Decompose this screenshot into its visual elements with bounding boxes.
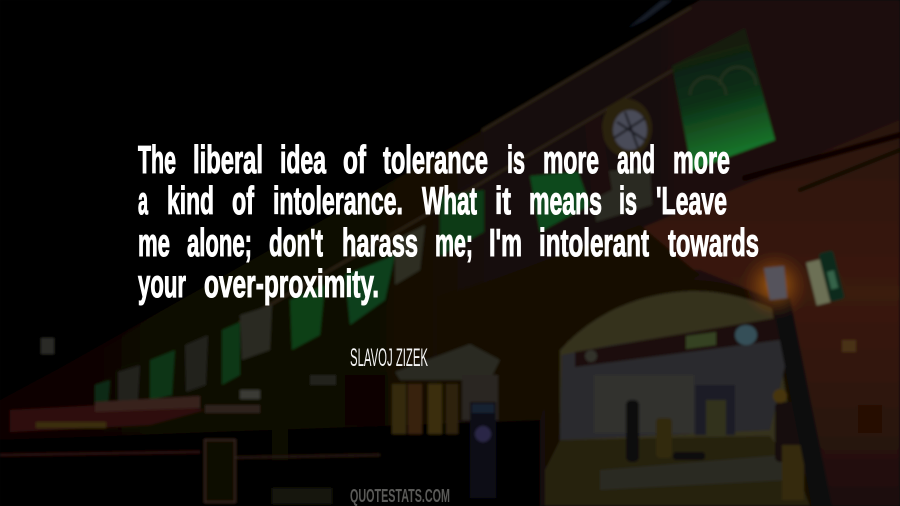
- watermark: QUOTESTATS.COM: [350, 486, 450, 506]
- quote line 3: don't: [269, 222, 323, 265]
- quote line 3: me;: [435, 222, 473, 265]
- cafe awnings and lights: [0, 390, 380, 502]
- watermark backdrop strip: [272, 488, 332, 504]
- quote line 2: it: [495, 180, 511, 223]
- quote line 3: intolerant: [539, 222, 649, 265]
- brick window: [858, 405, 882, 433]
- station arch: [545, 280, 830, 506]
- quote line 2: is: [619, 180, 637, 223]
- quote line 1: of: [343, 139, 367, 182]
- cream panel: [592, 168, 652, 222]
- shop entrance windows (lower centre): [310, 344, 500, 498]
- street lamp and post: [741, 251, 832, 506]
- quote line 2: [138, 180, 727, 223]
- quote line 1: The: [138, 139, 176, 182]
- vertical column: [272, 330, 288, 460]
- quote poster: SLAVOJ ZIZEK: [350, 344, 428, 372]
- cornice lines: [240, 8, 900, 322]
- green panel: centre: [530, 172, 590, 232]
- quote line 2: means: [529, 180, 602, 223]
- quote line 2: a: [138, 180, 148, 223]
- quote line 1: tolerance: [383, 139, 488, 182]
- quote line 3: [138, 222, 759, 265]
- brick band right: [560, 120, 900, 506]
- quote line 2: of: [232, 180, 255, 223]
- dark lower-left street: [0, 420, 540, 506]
- green panel: upper right: [672, 28, 775, 170]
- quote line 1: and: [617, 139, 655, 182]
- quote line 2: intolerance.: [273, 180, 403, 223]
- quote line 3: towards: [668, 222, 759, 265]
- quote line 4: over-proximity.: [204, 263, 379, 306]
- row of green bays: [41, 225, 425, 408]
- quote line 1: is: [507, 139, 525, 182]
- quote line 1: [138, 139, 730, 182]
- quote line 1: more: [543, 139, 599, 182]
- quote line 3: me: [138, 222, 170, 265]
- pillars and frames: [585, 115, 612, 200]
- quote line 3: harass: [342, 222, 418, 265]
- quote line 1: more: [673, 139, 730, 182]
- quote line 2: kind: [167, 180, 214, 223]
- roof lantern: [628, 0, 672, 28]
- round window: [602, 99, 652, 157]
- quote line 1: idea: [280, 139, 326, 182]
- quote line 2: What: [422, 180, 477, 223]
- quote line 4: [138, 263, 379, 306]
- quote line 1: liberal: [193, 139, 263, 182]
- quote text: [138, 139, 759, 306]
- quote line 3: alone;: [187, 222, 252, 265]
- quote line 4: your: [138, 263, 186, 306]
- quote line 3: I'm: [489, 222, 522, 265]
- quote line 2: 'Leave: [656, 180, 727, 223]
- green wall sign: [805, 250, 845, 305]
